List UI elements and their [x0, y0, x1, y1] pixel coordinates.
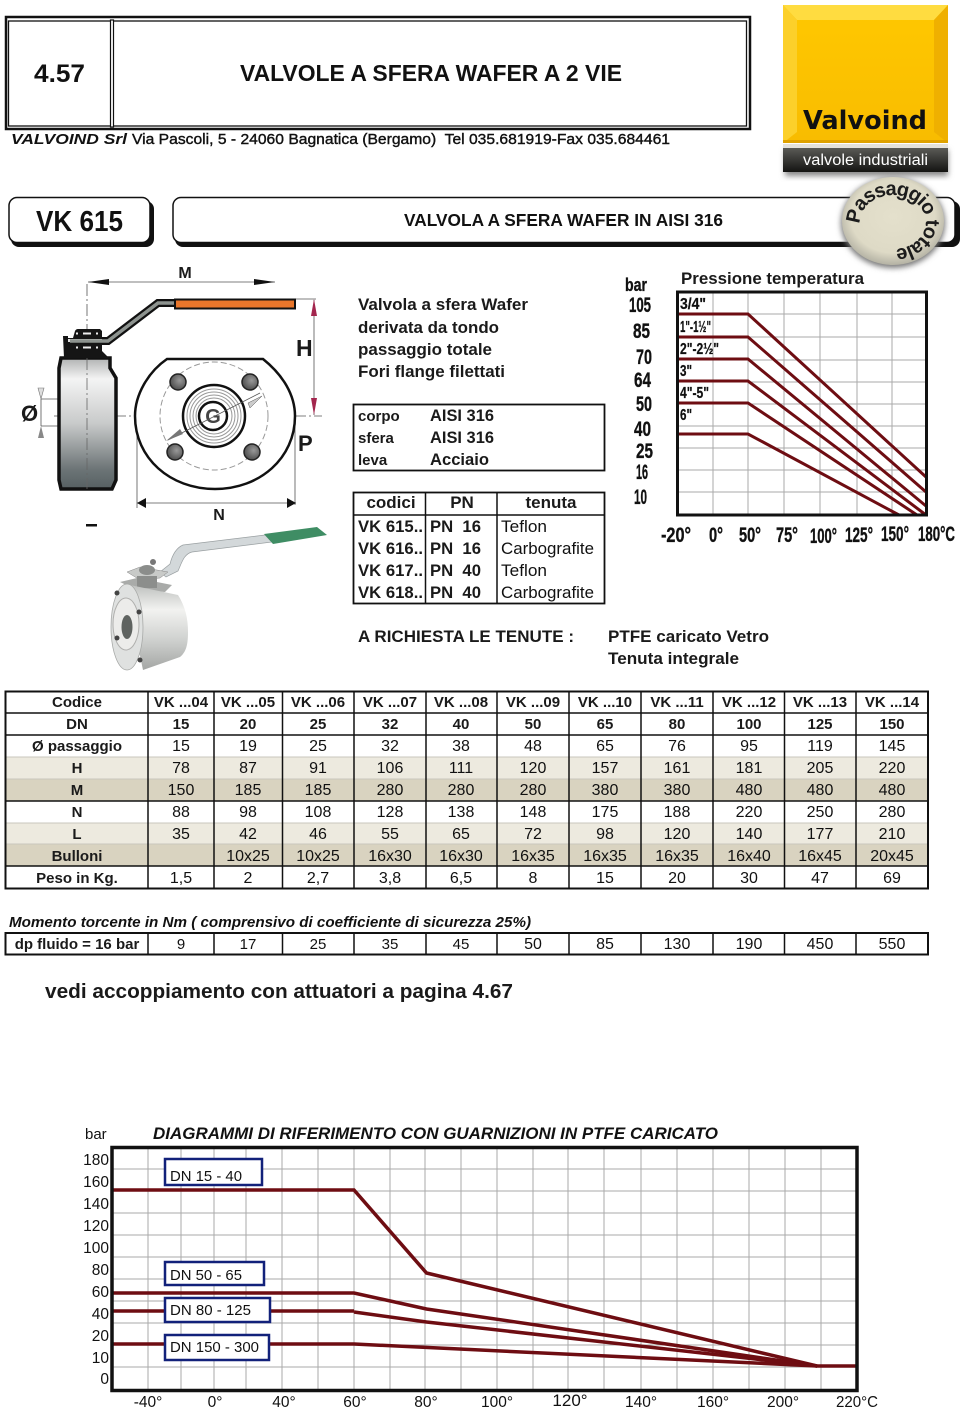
materials table: leva — [358, 452, 388, 469]
size labels: 6" — [680, 407, 692, 424]
dimension H: H — [296, 335, 313, 361]
row: H: 91 — [309, 760, 327, 777]
materials table — [354, 404, 604, 470]
row: H: 78 — [172, 760, 190, 777]
row: passaggio: 119 — [807, 738, 833, 755]
row: Peso: 47 — [811, 870, 829, 887]
row: Peso: 8 — [529, 870, 538, 887]
description text: passaggio totale — [358, 341, 492, 359]
row backgrounds — [5, 757, 928, 866]
centre bore — [183, 385, 245, 447]
row: Peso: 20 — [668, 870, 686, 887]
row: passaggio: 76 — [668, 738, 686, 755]
row: N: 108 — [305, 804, 331, 821]
row: M: M — [71, 782, 83, 799]
main title: VALVOLE A SFERA WAFER A 2 VIE — [240, 60, 622, 86]
bar axis labels: 120 — [83, 1218, 109, 1235]
row: passaggio: 19 — [239, 738, 257, 755]
legend: DN 80-125 — [165, 1298, 270, 1322]
dimension P: P — [298, 431, 313, 456]
row: Bulloni: 16x35 — [583, 848, 627, 865]
torque table: 130 — [664, 936, 690, 953]
row: DN: 100 — [736, 716, 762, 733]
size labels — [680, 296, 719, 424]
row: passaggio: 15 — [172, 738, 190, 755]
row: Bulloni: 16x30 — [368, 848, 412, 865]
row: Bulloni: 16x45 — [798, 848, 842, 865]
row: DN: 20 — [240, 716, 256, 733]
bolts — [167, 374, 260, 460]
bar axis labels: 105 — [629, 294, 651, 317]
row: DN: 80 — [669, 716, 685, 733]
row: L: 140 — [736, 826, 762, 843]
row: Codice: VK ...11 — [650, 694, 704, 711]
codes table: VK 617.. — [358, 562, 423, 580]
on-request sealing note — [358, 628, 769, 668]
row: DN: 32 — [382, 716, 398, 733]
bar axis labels: 100 — [83, 1240, 109, 1257]
row: Bulloni: 16x30 — [439, 848, 483, 865]
pressure temperature chart — [625, 270, 955, 548]
row: N: 250 — [807, 804, 833, 821]
row: N: 88 — [172, 804, 190, 821]
PTFE reference chart — [83, 1124, 878, 1409]
row: M: 480 — [879, 782, 905, 799]
pressure curves — [112, 1190, 856, 1366]
company address line: Via Pascoli, 5 - 24060 Bagnatica (Bergamo) Tel 035.681919-Fax 035.684461 — [132, 131, 670, 148]
row: passaggio: 48 — [524, 738, 542, 755]
codes table — [353, 492, 605, 604]
logo: Valvoind — [783, 5, 948, 176]
valve stem — [63, 329, 109, 358]
temperature axis labels: 100° — [810, 525, 837, 548]
bar axis labels: 16 — [636, 461, 648, 484]
codes table: PN 16 — [430, 540, 481, 558]
dimensions table — [5, 691, 928, 888]
size labels: 3" — [680, 363, 692, 380]
row: L: 120 — [664, 826, 690, 843]
row: N: 138 — [448, 804, 474, 821]
badge: passaggio totale: Passaggio totale — [846, 184, 939, 260]
row: N: 220 — [736, 804, 762, 821]
row: Codice: VK ...08 — [434, 694, 488, 711]
row: Codice: VK ...14 — [865, 694, 920, 711]
row: Codice: VK ...09 — [506, 694, 560, 711]
row: H: H — [72, 760, 82, 777]
flange face — [111, 584, 143, 670]
row: passaggio: 95 — [740, 738, 758, 755]
on-request sealing note: A RICHIESTA LE TENUTE : — [358, 628, 574, 646]
chart title: DIAGRAMMI DI RIFERIMENTO CON GUARNIZIONI IN PTFE CARICATO — [153, 1124, 718, 1143]
bar axis labels — [625, 275, 653, 509]
legend: DN 150-300 — [165, 1335, 269, 1360]
row: M — [71, 782, 905, 799]
row: Bulloni: 10x25 — [296, 848, 340, 865]
row: passaggio: 25 — [309, 738, 327, 755]
materials table: AISI 316 — [430, 407, 494, 425]
torque table: 190 — [736, 936, 762, 953]
row: Codice: VK ...12 — [722, 694, 776, 711]
codes table: Carbografite — [501, 540, 594, 558]
dimension H — [296, 299, 317, 415]
row: DN — [66, 716, 905, 733]
row: passaggio: 145 — [879, 738, 905, 755]
row: H — [72, 760, 905, 777]
row: L: 46 — [309, 826, 327, 843]
row: N: 175 — [592, 804, 618, 821]
materials table: corpo — [358, 408, 400, 425]
valve side body — [59, 358, 116, 489]
torque table: 17 — [240, 936, 256, 953]
row: Bulloni: Bulloni — [52, 848, 102, 865]
centre bore: G — [205, 406, 221, 428]
bar axis labels: 140 — [83, 1196, 109, 1213]
on-request sealing note: Tenuta integrale — [608, 650, 739, 668]
legend: DN 150-300: DN 150 - 300 — [170, 1340, 259, 1356]
row: Peso: 2 — [244, 870, 253, 887]
row: Bulloni: 16x35 — [511, 848, 555, 865]
dimension N: N — [213, 507, 225, 524]
bar axis labels — [83, 1126, 109, 1388]
legend: DN 15-40: DN 15 - 40 — [170, 1169, 242, 1185]
bar axis labels: bar — [625, 275, 647, 295]
temperature axis labels: 125° — [845, 524, 873, 547]
row: H: 87 — [239, 760, 257, 777]
row: Codice: VK ...04 — [154, 694, 209, 711]
codes table: tenuta — [526, 493, 577, 512]
row: M: 480 — [736, 782, 762, 799]
product title box: VALVOLA A SFERA WAFER IN AISI 316 — [404, 210, 723, 230]
codes table: PN 40 — [430, 562, 481, 580]
bar axis labels: 40 — [92, 1306, 109, 1323]
row: N: 98 — [239, 804, 257, 821]
row: Peso: 6,5 — [450, 870, 472, 887]
bar axis labels: 160 — [83, 1174, 109, 1191]
row: DN: 65 — [597, 716, 613, 733]
torque table: 85 — [596, 936, 614, 953]
row: M: 150 — [168, 782, 194, 799]
row: Codice: VK ...07 — [363, 694, 417, 711]
codes table: PN 40 — [430, 584, 481, 602]
bar axis labels: 80 — [92, 1262, 109, 1279]
row: M: 280 — [377, 782, 403, 799]
bar axis labels: 64 — [634, 369, 651, 392]
codes table: PN — [450, 493, 474, 512]
row: N: 128 — [377, 804, 403, 821]
row: DN: 150 — [879, 716, 905, 733]
bar axis labels: 50 — [636, 393, 652, 416]
row: DN: 15 — [173, 716, 189, 733]
row: Peso: 15 — [596, 870, 614, 887]
torque table: 50 — [524, 936, 542, 953]
row: L: 177 — [807, 826, 833, 843]
description text: Fori flange filettati — [358, 363, 505, 381]
product title box — [173, 198, 960, 247]
torque table: 9 — [177, 936, 185, 953]
row: passaggio — [32, 738, 905, 755]
row: L: 98 — [596, 826, 614, 843]
row: passaggio: 38 — [452, 738, 470, 755]
stem and plate — [120, 578, 172, 592]
row: Peso — [36, 870, 901, 887]
product code box: VK 615 — [36, 206, 123, 238]
chart title: Pressione temperatura — [681, 270, 865, 288]
torque heading: Momento torcente in Nm ( comprensivo di coefficiente di sicurezza 25%) — [9, 915, 531, 931]
torque table: 35 — [382, 936, 398, 953]
torque table: 25 — [310, 936, 326, 953]
centre lines — [41, 284, 322, 508]
codes table: codici — [366, 493, 416, 512]
torque table: dp fluido = 16 bar — [15, 936, 139, 953]
dimension M — [88, 265, 275, 285]
dimension O — [21, 388, 44, 438]
bar axis labels: 60 — [92, 1284, 109, 1301]
handle — [160, 535, 272, 577]
row: N: 188 — [664, 804, 690, 821]
materials table: Acciaio — [430, 451, 489, 469]
row: M: 380 — [592, 782, 618, 799]
row: L: 65 — [452, 826, 470, 843]
temperature axis labels: 150° — [881, 523, 909, 546]
row: M: 380 — [664, 782, 690, 799]
cylinder — [125, 584, 188, 670]
row: N: N — [72, 804, 82, 821]
row: DN: 25 — [310, 716, 326, 733]
row: Bulloni: 20x45 — [870, 848, 914, 865]
row: DN: 50 — [525, 716, 541, 733]
row: N: 280 — [879, 804, 905, 821]
temperature axis labels: 75° — [776, 524, 798, 547]
valve photograph — [111, 527, 327, 670]
size labels: 4"-5" — [680, 385, 709, 402]
row: N — [72, 804, 905, 821]
codes table: Teflon — [501, 518, 547, 536]
codes table: VK 616.. — [358, 540, 423, 558]
row: H: 111 — [449, 760, 473, 777]
row: Peso: 30 — [740, 870, 758, 887]
row: M: 480 — [807, 782, 833, 799]
torque table: 450 — [807, 936, 833, 953]
row: Codice — [52, 694, 920, 711]
row: H: 120 — [520, 760, 546, 777]
row: L: 42 — [239, 826, 257, 843]
size labels: 1"-1½" — [680, 319, 711, 336]
row: M: 280 — [520, 782, 546, 799]
dimension M: M — [178, 265, 192, 282]
torque table — [6, 933, 928, 954]
bar axis labels: 40 — [634, 418, 651, 441]
row: M: 185 — [305, 782, 331, 799]
row: L — [72, 826, 905, 843]
row: L: L — [72, 826, 82, 843]
bar axis labels: 10 — [634, 486, 647, 509]
pressure curves — [677, 314, 926, 515]
description text — [358, 296, 529, 381]
row: Peso: 1,5 — [170, 870, 192, 887]
dimension O: Ø — [21, 401, 38, 426]
size labels: 3/4" — [680, 296, 706, 313]
row: M: 185 — [235, 782, 261, 799]
actuator coupling note: vedi accoppiamento con attuatori a pagina 4.67 — [45, 980, 513, 1003]
row: L: 72 — [524, 826, 542, 843]
header title frame — [6, 17, 750, 129]
bar axis labels: 85 — [633, 320, 650, 343]
bar axis labels: 180 — [83, 1152, 109, 1169]
temperature axis labels — [134, 1391, 878, 1409]
technical drawing of valve — [21, 265, 322, 526]
bar axis labels: 25 — [636, 440, 653, 463]
row: Codice: VK ...10 — [578, 694, 632, 711]
temperature axis labels: 50° — [739, 524, 761, 547]
row: Codice: Codice — [52, 694, 102, 711]
description text: derivata da tondo — [358, 319, 499, 337]
row: Bulloni: 10x25 — [226, 848, 270, 865]
row: N: 148 — [520, 804, 546, 821]
legend: DN 50-65 — [165, 1262, 264, 1285]
codes table: VK 615.. — [358, 518, 423, 536]
torque table: 550 — [879, 936, 905, 953]
logo tagline: valvole industriali — [803, 152, 928, 169]
page number: 4.57 — [34, 60, 85, 88]
dimension N — [137, 498, 296, 524]
torque table: 45 — [453, 936, 469, 953]
flange front — [135, 359, 295, 489]
bar axis labels: bar — [85, 1126, 107, 1143]
row: Peso: Peso in Kg. — [36, 870, 118, 887]
row: Bulloni: 16x40 — [727, 848, 771, 865]
temperature axis labels: -20° — [661, 524, 691, 547]
row: Codice: VK ...06 — [291, 694, 345, 711]
row: passaggio: 32 — [381, 738, 399, 755]
bar axis labels: 10 — [92, 1350, 109, 1367]
row: H: 205 — [807, 760, 833, 777]
codes table: Teflon — [501, 562, 547, 580]
row: H: 106 — [377, 760, 403, 777]
row: Bulloni — [52, 848, 914, 865]
company address line: VALVOIND Srl — [11, 131, 128, 148]
row: L: 210 — [879, 826, 905, 843]
bar axis labels: 0 — [100, 1371, 109, 1388]
row: Codice: VK ...13 — [793, 694, 847, 711]
row: DN: 40 — [453, 716, 469, 733]
row: H: 220 — [879, 760, 905, 777]
bar axis labels: 20 — [92, 1328, 109, 1345]
codes table: Carbografite — [501, 584, 594, 602]
codes table: VK 618.. — [358, 584, 423, 602]
row: Peso: 3,8 — [379, 870, 401, 887]
row: Bulloni: 16x35 — [655, 848, 699, 865]
row: Codice: VK ...05 — [221, 694, 275, 711]
legend: DN 15-40 — [165, 1159, 262, 1185]
temperature axis labels: 0° — [709, 524, 723, 547]
legend: DN 80-125: DN 80 - 125 — [170, 1303, 251, 1319]
row: H: 157 — [592, 760, 618, 777]
row: H: 161 — [664, 760, 690, 777]
temperature axis labels — [661, 523, 955, 548]
row: Peso: 2,7 — [307, 870, 329, 887]
codes table: PN 16 — [430, 518, 481, 536]
lever — [102, 303, 176, 341]
size labels: 2"-2½" — [680, 341, 719, 358]
materials table: AISI 316 — [430, 429, 494, 447]
logo wordmark: Valvoind — [803, 106, 927, 136]
row: DN: DN — [66, 716, 88, 733]
bar axis labels: 70 — [636, 346, 652, 369]
dimension L — [86, 524, 97, 526]
row: Peso: 69 — [883, 870, 901, 887]
materials table: sfera — [358, 430, 395, 447]
row: H: 181 — [736, 760, 762, 777]
row: L: 55 — [381, 826, 399, 843]
row: passaggio: 65 — [596, 738, 614, 755]
on-request sealing note: PTFE caricato Vetro — [608, 628, 769, 646]
product code box — [9, 198, 154, 247]
row: M: 280 — [448, 782, 474, 799]
description text: Valvola a sfera Wafer — [358, 296, 529, 314]
row: passaggio: Ø passaggio — [32, 738, 122, 755]
row: L: 35 — [172, 826, 190, 843]
row: DN: 125 — [807, 716, 833, 733]
legend: DN 50-65: DN 50 - 65 — [170, 1268, 242, 1284]
